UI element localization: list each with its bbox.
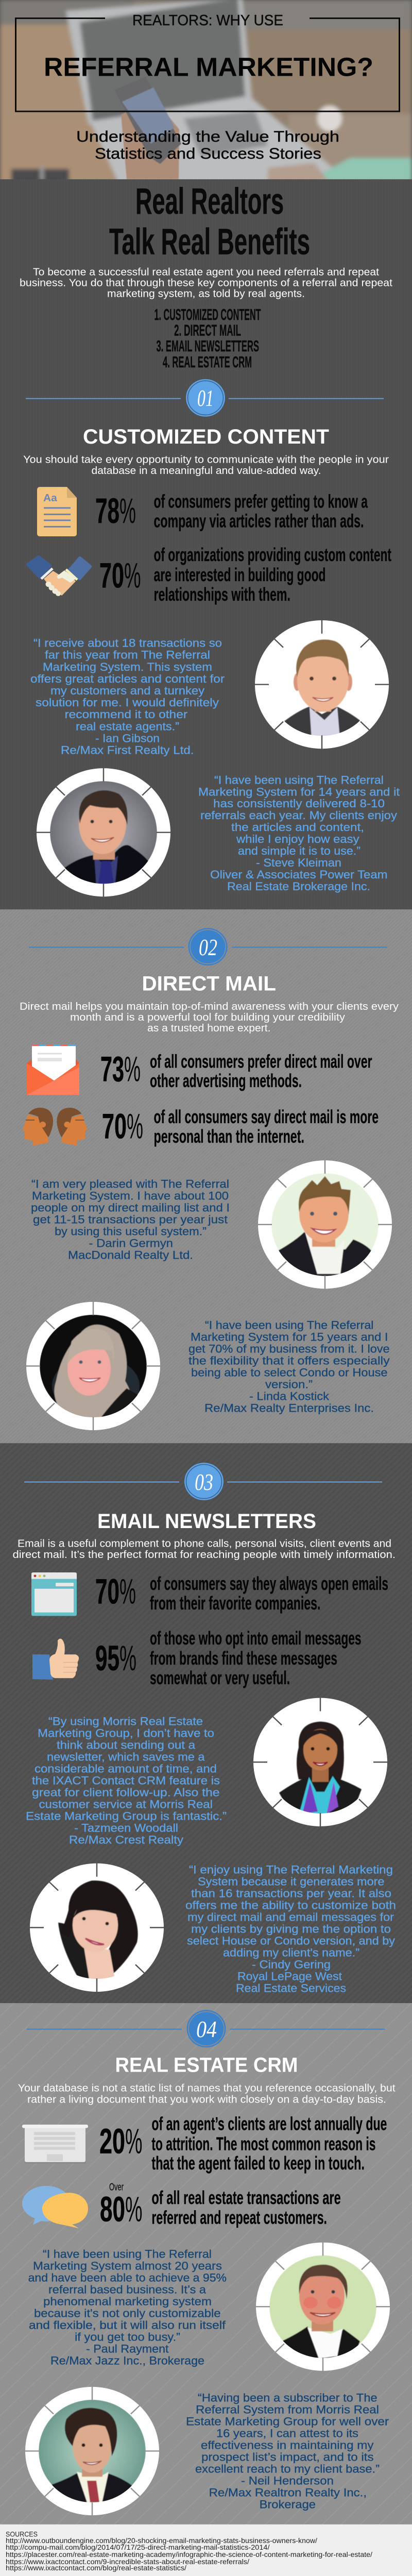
quote: Steve Kleiman: has consistently delivered 8-10 xyxy=(213,798,385,810)
stat: 73 percent xyxy=(100,1049,372,1091)
heading: direct mail: DIRECT MAIL xyxy=(142,972,276,995)
quote: Ian Gibson: “I receive about 18 transactions so xyxy=(33,637,222,650)
panel: sources: https://placester.com/real-estate-marketing-academy/infographic-the-science-of-content-marketing-for-real-estate/ xyxy=(6,2551,372,2558)
quote: Darin Germyn: - Darin Germyn xyxy=(89,1237,173,1249)
panel: sources: https://www.ixactcontact.com/9-incredible-stats-about-real-estate-referrals/ xyxy=(6,2558,249,2566)
icon: envelope xyxy=(27,1044,79,1095)
quote: Ian Gibson: my customers and a turnkey xyxy=(50,684,205,697)
quote: Tazmeen Woodall: Marketing Group, I don’t have to xyxy=(38,1727,214,1739)
icon: document: Aa xyxy=(43,492,57,504)
quote: Ian Gibson xyxy=(30,637,225,756)
stat: 70 percent personal: % xyxy=(127,1106,143,1146)
quote: Neil Henderson: excellent reach to my client base.” xyxy=(195,2463,380,2476)
stat: over 80 percent: Over xyxy=(109,2181,124,2193)
intro text xyxy=(20,266,392,299)
stat: 95 percent: somewhat or very useful. xyxy=(150,1667,290,1688)
heading: real estate crm: REAL ESTATE CRM xyxy=(115,2053,298,2076)
stat: 78 percent: % xyxy=(119,490,136,530)
panel: sources: SOURCES xyxy=(6,2531,38,2538)
quote: Tazmeen Woodall: Re/Max Crest Realty xyxy=(69,1834,184,1846)
quote: Darin Germyn xyxy=(31,1178,230,1261)
quote: Ian Gibson: Re/Max First Realty Ltd. xyxy=(61,744,194,756)
quote: Steve Kleiman: the articles and content, xyxy=(231,821,364,834)
panel: real estate crm xyxy=(0,2003,412,2524)
stat: 95 percent: 95 xyxy=(95,1638,119,1678)
quote: Cindy Gering: “I enjoy using The Referral Marketing xyxy=(189,1863,393,1876)
quote: Cindy Gering: than 16 transactions per year. It also xyxy=(191,1887,391,1900)
quote: Steve Kleiman: “I have been using The Referral xyxy=(214,774,384,786)
icon: two faces xyxy=(23,1108,87,1146)
quote: Cindy Gering: offers me the ability to customize both xyxy=(185,1899,396,1911)
intro text: marketing system, as told by real agents. xyxy=(107,288,305,299)
quote: Tazmeen Woodall: Estate Marketing Group is fantastic.” xyxy=(26,1810,227,1822)
portrait: Tazmeen Woodall xyxy=(253,1698,388,1827)
panel: sources xyxy=(0,2524,412,2576)
portrait: Steve Kleiman xyxy=(36,768,171,897)
quote: Steve Kleiman: Real Estate Brokerage Inc. xyxy=(227,880,370,893)
divider with number 03: 03 xyxy=(195,1469,213,1496)
title: referral marketing: REFERRAL MARKETING? xyxy=(44,53,373,82)
icon: browser window xyxy=(31,1572,77,1616)
quote: Darin Germyn: by using this useful system.” xyxy=(55,1225,207,1238)
panel: direct mail xyxy=(0,909,412,1443)
quote: Ian Gibson: real estate agents.” xyxy=(76,720,179,733)
portrait: Paul Rayment xyxy=(255,2242,390,2371)
quote: Steve Kleiman: - Steve Kleiman xyxy=(256,856,341,869)
divider with number 01: 01 xyxy=(197,385,214,412)
subtitle: Understanding the Value Through xyxy=(76,129,339,145)
heading: email newsletters: EMAIL NEWSLETTERS xyxy=(97,1510,316,1533)
icon: speech bubbles xyxy=(22,2186,88,2228)
quote: Steve Kleiman: while I enjoy how easy xyxy=(236,833,359,845)
quote: Darin Germyn: get 11-15 transactions per year just xyxy=(33,1213,228,1226)
description: database in a meaningful and value-added way. xyxy=(92,465,321,477)
component list: 4. REAL ESTATE CRM xyxy=(163,353,252,371)
quote: Ian Gibson: far this year from The Referral xyxy=(45,649,210,662)
quote: Neil Henderson: Brokerage xyxy=(260,2498,316,2511)
quote: Ian Gibson: Marketing System. This system xyxy=(43,660,212,673)
quote: Paul Rayment: and have been able to achieve a 95% xyxy=(28,2272,227,2284)
description xyxy=(18,2082,396,2105)
divider with number 02 xyxy=(29,928,387,965)
component list: 3. EMAIL NEWSLETTERS xyxy=(157,337,259,355)
quote: Paul Rayment: Re/Max Jazz Inc., Brokerage xyxy=(50,2354,204,2367)
divider with number 03 xyxy=(24,1463,382,1500)
section background xyxy=(0,1443,412,2003)
component list xyxy=(154,306,261,371)
stat: 70 percent open xyxy=(95,1571,388,1614)
stat: over 80 percent: 80 xyxy=(100,2189,125,2229)
quote: Paul Rayment: referral based business. It’s a xyxy=(48,2283,206,2296)
stat: 70 percent personal: personal than the internet. xyxy=(153,1126,304,1147)
description: Email is a useful complement to phone calls, personal visits, client events and xyxy=(18,1538,391,1549)
stat: 78 percent xyxy=(95,490,368,531)
description xyxy=(20,1001,399,1034)
quote: Linda Kostick xyxy=(188,1319,390,1414)
quote: Darin Germyn: “I am very pleased with The Referral xyxy=(31,1178,229,1190)
stat: 73 percent: other advertising methods. xyxy=(150,1070,302,1091)
quote: Ian Gibson: recommend it to other xyxy=(65,708,188,721)
stat: 70 percent: 70 xyxy=(99,555,124,595)
quote: Cindy Gering: System because it generates more xyxy=(198,1875,384,1888)
quote: Tazmeen Woodall: customer service at Morris Real xyxy=(39,1798,213,1810)
quote: Cindy Gering: - Cindy Gering xyxy=(252,1958,331,1971)
panel: email newsletters xyxy=(0,1443,412,2003)
quote: Darin Germyn: people on my direct mailing list and I xyxy=(31,1201,230,1214)
quote: Neil Henderson xyxy=(186,2392,389,2511)
quote: Cindy Gering: Royal LePage West xyxy=(237,1970,342,1982)
stat: 70 percent open: % xyxy=(119,1571,136,1611)
icon: handshake xyxy=(27,556,91,596)
quote: Neil Henderson: effectiveness in maintaining my xyxy=(201,2439,374,2452)
description xyxy=(23,454,389,477)
stat: 70 percent personal: 70 xyxy=(102,1106,127,1146)
stat: 70 percent xyxy=(99,544,391,605)
intro text: business. You do that through these key components of a referral and repeat xyxy=(20,277,392,289)
quote: Tazmeen Woodall: considerable amount of time, and xyxy=(35,1762,217,1775)
quote: Cindy Gering xyxy=(185,1863,396,1994)
description: You should take every opportunity to communicate with the people in your xyxy=(23,454,389,465)
quote: Neil Henderson: “Having been a subscriber to The xyxy=(198,2392,377,2404)
quote: Neil Henderson: Referral System from Morris Real xyxy=(196,2403,379,2416)
section background xyxy=(0,179,412,910)
stat: 20 percent xyxy=(99,2113,387,2174)
panel: sources: https://www.ixactcontact.com/blog/real-estate-statistics/ xyxy=(6,2564,186,2572)
heading: real realtors talk real benefits: Real Realtors xyxy=(135,180,284,222)
quote: Darin Germyn: MacDonald Realty Ltd. xyxy=(68,1249,193,1261)
quote: Paul Rayment xyxy=(28,2248,227,2367)
stat: over 80 percent xyxy=(100,2181,341,2229)
quote: Cindy Gering: adding my client's name.” xyxy=(223,1946,359,1959)
description: rather a living document that you work with closely on a day-to-day basis. xyxy=(27,2094,386,2105)
subtitle: Statistics and Success Stories xyxy=(95,146,321,162)
description: month and is a powerful tool for building your credibility xyxy=(70,1012,346,1023)
stat: 73 percent: % xyxy=(124,1049,141,1089)
description xyxy=(12,1538,396,1561)
portrait: Cindy Gering xyxy=(29,1863,164,1992)
quote: Steve Kleiman: Oliver & Associates Power Team xyxy=(210,868,387,881)
panel: sources: http://www.outboundengine.com/blog/20-shocking-email-marketing-stats-business-owners-know/ xyxy=(6,2537,317,2545)
description: Direct mail helps you maintain top-of-mind awareness with your clients every xyxy=(20,1001,399,1012)
quote: Cindy Gering: my clients by giving me the option to xyxy=(191,1923,391,1935)
quote: Steve Kleiman: Marketing System for 14 years and it xyxy=(198,786,400,798)
description: Your database is not a static list of names that you reference occasionally, but xyxy=(18,2082,396,2094)
stat: 70 percent: relationships with them. xyxy=(153,584,290,605)
quote: Ian Gibson: - Ian Gibson xyxy=(95,732,160,744)
quote: Cindy Gering: my direct mail and email messages for xyxy=(187,1911,394,1923)
stat: 20 percent: % xyxy=(125,2121,143,2161)
quote: Linda Kostick: version.” xyxy=(265,1378,313,1391)
quote: Paul Rayment: because it's not only customizable xyxy=(34,2307,221,2319)
quote: Steve Kleiman xyxy=(198,774,400,893)
stat: 95 percent xyxy=(95,1628,362,1688)
quote: Tazmeen Woodall: newsletter, which saves me a xyxy=(47,1751,205,1763)
quote: Neil Henderson: prospect list’s impact, and to its xyxy=(201,2451,374,2464)
portrait: Neil Henderson xyxy=(25,2386,160,2516)
divider with number 04 xyxy=(27,2010,385,2047)
quote: Linda Kostick: get 70% of my business from it. I love xyxy=(188,1343,390,1355)
quote: Tazmeen Woodall: think about sending out a xyxy=(57,1739,196,1751)
quote: Paul Rayment: - Paul Rayment xyxy=(86,2343,169,2355)
divider with number 04: 04 xyxy=(196,2016,217,2043)
section background xyxy=(0,2003,412,2524)
title: realtors why use: REALTORS: WHY USE xyxy=(132,12,283,29)
stat: 20 percent: 20 xyxy=(99,2121,125,2161)
quote: Ian Gibson: offers great articles and content for xyxy=(30,672,225,685)
portrait: Darin Germyn xyxy=(258,1160,392,1289)
quote: Steve Kleiman: and simple it is to use.” xyxy=(238,844,360,857)
quote: Linda Kostick: “I have been using The Referral xyxy=(205,1319,374,1331)
subtitle xyxy=(76,129,339,162)
quote: Linda Kostick: - Linda Kostick xyxy=(249,1390,330,1402)
quote: Paul Rayment: if you get too busy.” xyxy=(75,2331,180,2343)
section background xyxy=(0,909,412,1443)
quote: Linda Kostick: being able to select Condo or House xyxy=(191,1366,387,1379)
hero panel xyxy=(0,0,412,183)
panel: customized content xyxy=(0,179,412,910)
quote: Darin Germyn: Marketing System. I have about 100 xyxy=(32,1190,229,1202)
description: as a trusted home expert. xyxy=(147,1022,271,1034)
quote: Cindy Gering: Real Estate Services xyxy=(236,1982,346,1994)
quote: Tazmeen Woodall: great for client follow-up. Also the xyxy=(32,1786,219,1799)
stat: 70 percent open: 70 xyxy=(95,1571,119,1611)
quote: Neil Henderson: Re/Max Realtron Realty Inc., xyxy=(209,2486,367,2499)
portrait: Ian Gibson xyxy=(254,620,389,749)
stat: 95 percent: % xyxy=(119,1638,136,1678)
quote: Tazmeen Woodall: “By using Morris Real Estate xyxy=(48,1715,203,1727)
quote: Linda Kostick: Re/Max Realty Enterprises Inc. xyxy=(204,1402,374,1414)
quote: Tazmeen Woodall xyxy=(26,1715,227,1846)
quote: Paul Rayment: phenomenal marketing system xyxy=(43,2295,212,2308)
panel: sources: http://compu-mail.com/blog/2014/07/17/25-direct-marketing-mail-statistics-2014/ xyxy=(6,2544,270,2551)
component list: 2. DIRECT MAIL xyxy=(174,321,241,339)
quote: Paul Rayment: and flexible, but it will also run itself xyxy=(29,2319,226,2331)
intro text: To become a successful real estate agent you need referrals and repeat xyxy=(33,266,379,278)
quote: Neil Henderson: 16 years, I can attest to its xyxy=(216,2427,358,2440)
quote: Tazmeen Woodall: - Tazmeen Woodall xyxy=(74,1822,178,1834)
description: direct mail. It’s the perfect format for reaching people with timely information. xyxy=(12,1549,396,1561)
quote: Steve Kleiman: referrals each year. My clients enjoy xyxy=(200,809,398,822)
stat: 70 percent: % xyxy=(124,555,141,595)
quote: Neil Henderson: - Neil Henderson xyxy=(241,2475,334,2487)
icon: thumbs up xyxy=(32,1639,79,1680)
quote: Ian Gibson: solution for me. I would definitely xyxy=(36,696,219,709)
quote: Neil Henderson: Estate Marketing Group for well over xyxy=(186,2415,389,2428)
divider with number 01 xyxy=(26,379,384,417)
quote: Cindy Gering: select House or Condo version, and by xyxy=(187,1935,396,1947)
portrait: Linda Kostick xyxy=(26,1301,161,1431)
quote: Tazmeen Woodall: the IXACT Contact CRM feature is xyxy=(32,1774,220,1787)
quote: Linda Kostick: Marketing System for 15 years and I xyxy=(191,1331,388,1343)
divider with number 02: 02 xyxy=(199,935,217,961)
stat: 70 percent personal xyxy=(102,1106,379,1147)
icon: document xyxy=(37,487,77,536)
quote: Linda Kostick: the flexibility that it offers especially xyxy=(188,1354,390,1367)
hero photo background xyxy=(0,0,412,183)
heading: real realtors talk real benefits xyxy=(109,180,310,262)
stat: 78 percent: 78 xyxy=(95,490,119,530)
stat: over 80 percent: % xyxy=(125,2189,143,2229)
component list: 1. CUSTOMIZED CONTENT xyxy=(154,306,261,324)
stat: 73 percent: 73 xyxy=(100,1049,124,1089)
quote: Paul Rayment: Marketing System almost 20 years xyxy=(33,2260,222,2272)
quote: Paul Rayment: “I have been using The Referral xyxy=(43,2248,212,2260)
heading: customized content: CUSTOMIZED CONTENT xyxy=(83,425,329,448)
title frame xyxy=(15,18,400,111)
icon: laptop xyxy=(22,2125,88,2163)
